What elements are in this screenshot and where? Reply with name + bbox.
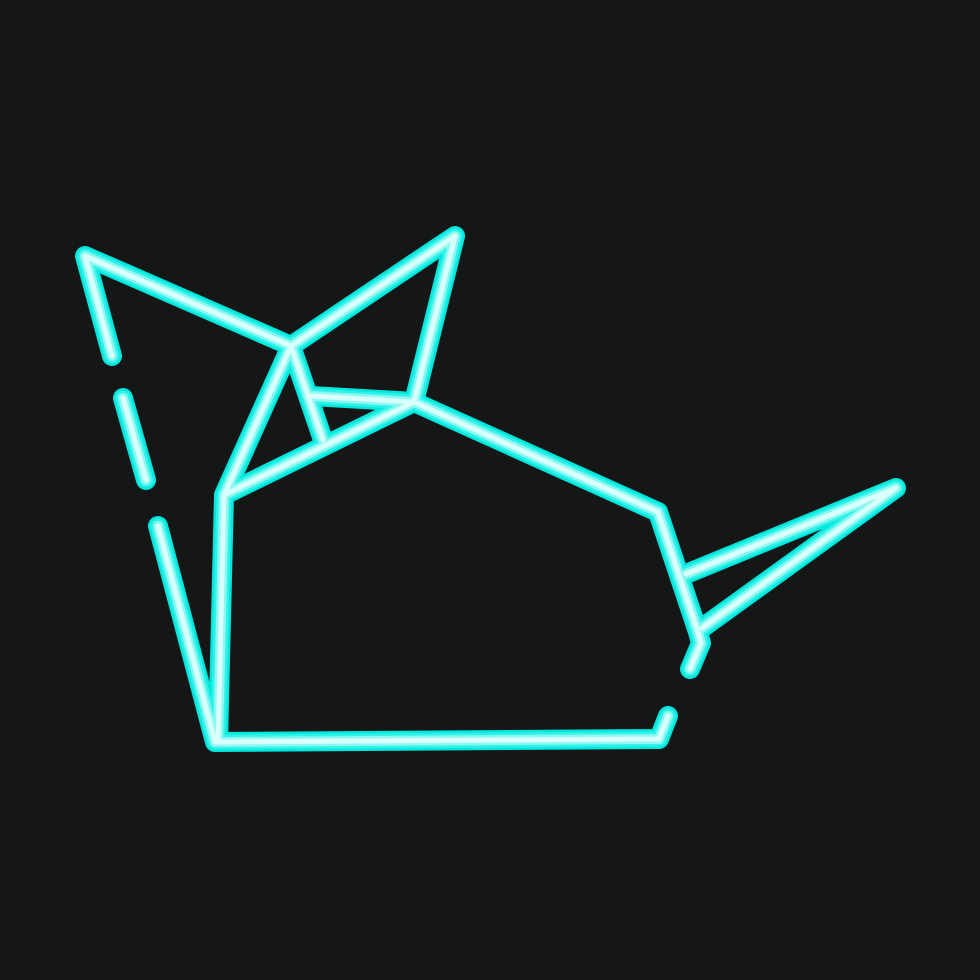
mouse outline [85,236,896,742]
